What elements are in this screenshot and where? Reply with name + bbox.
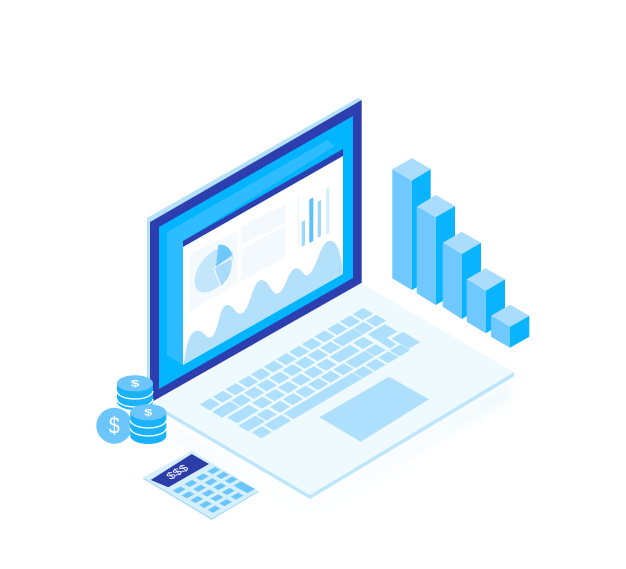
window title bar — [183, 149, 343, 247]
calculator display — [151, 454, 209, 487]
column 3 — [443, 232, 481, 319]
column 5 — [491, 305, 529, 348]
screen blue inner — [159, 116, 353, 389]
column 2 — [417, 195, 455, 305]
coin stack back: $ — [131, 378, 139, 389]
keyboard — [200, 307, 423, 440]
screen bezel — [150, 100, 362, 403]
coin stack front: $ — [144, 407, 152, 418]
window — [183, 156, 343, 365]
trackpad — [319, 377, 429, 442]
big coin: $ — [109, 413, 120, 439]
coin stack front — [130, 404, 166, 444]
area chart — [183, 241, 343, 365]
big coin — [96, 408, 132, 444]
panel: pie background — [190, 232, 237, 311]
laptop screen — [147, 98, 362, 403]
laptop shadow — [170, 380, 510, 520]
coin stack back — [117, 375, 153, 410]
panel: bottom card — [241, 225, 286, 282]
calculator buttons — [173, 467, 255, 513]
display text: $$$ — [163, 462, 192, 482]
screen rim — [147, 98, 362, 403]
laptop base — [153, 283, 514, 499]
calculator — [143, 451, 258, 520]
bar chart: isometric columns — [392, 158, 529, 348]
column 4 — [467, 268, 505, 333]
column 1 — [392, 158, 431, 290]
panel: top card — [241, 204, 286, 245]
pie chart — [194, 239, 234, 301]
mini bar chart — [298, 187, 329, 250]
window glow — [167, 140, 335, 365]
